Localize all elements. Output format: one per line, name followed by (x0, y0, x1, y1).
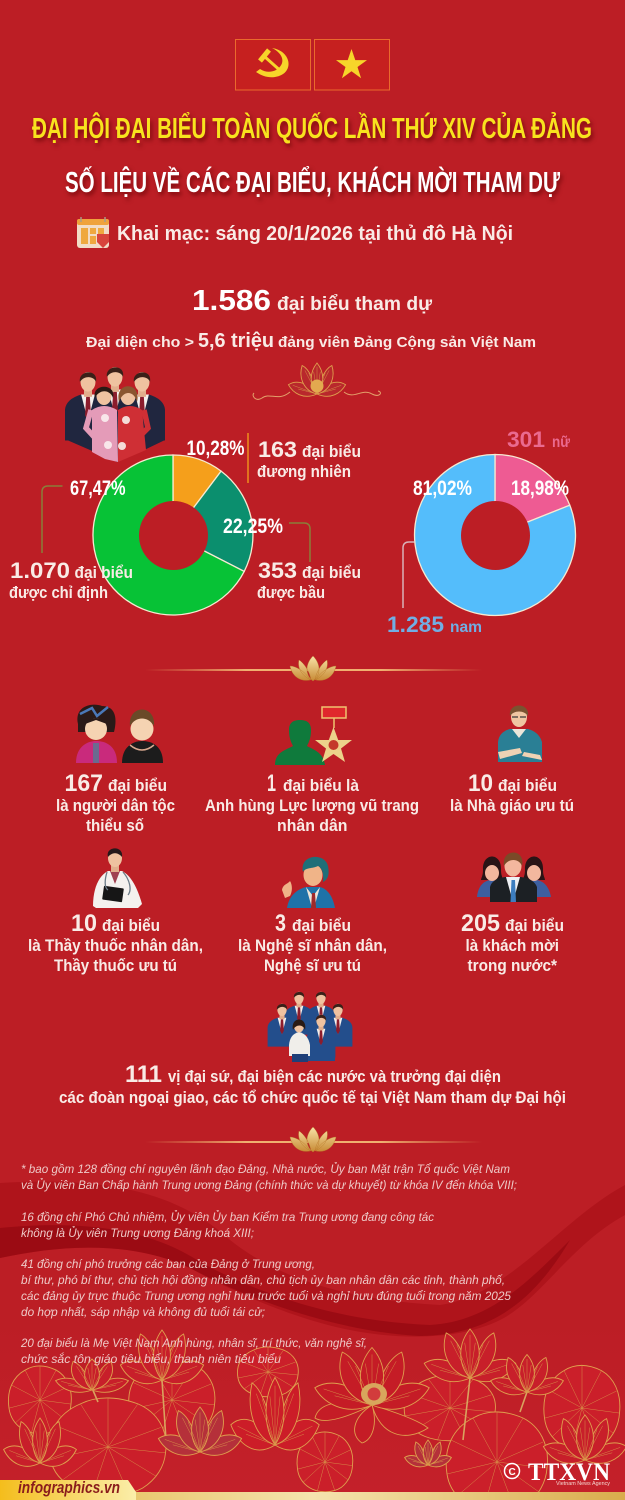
footnote: * bao gồm 128 đồng chí nguyên lãnh đạo Đảng, Nhà nước, Ủy ban Mặt trận Tổ quốc Việt Nam (21, 1161, 510, 1176)
group: female label (507, 427, 570, 500)
party flag (236, 40, 310, 90)
card: artists: 3 (275, 910, 286, 937)
card: outstanding teachers: 10 (468, 770, 493, 797)
card: domestic guests: là khách mời (466, 937, 559, 955)
footnote: không là Ủy viên Trung ương Đảng khoá XIII; (21, 1225, 254, 1240)
footer bar (0, 1478, 625, 1500)
national flag (314, 40, 390, 90)
group: ex-officio delegates label: đại biểu (302, 442, 361, 461)
woman in red ao dai (118, 386, 148, 462)
diplomats text (59, 1061, 566, 1107)
icon: diplomats group (268, 992, 352, 1062)
card: armed forces hero: 1 (267, 770, 276, 797)
group: appointed delegates label: được chỉ định (9, 583, 108, 602)
card: artists: đại biểu (292, 917, 351, 935)
card: doctors: Thầy thuốc ưu tú (54, 957, 177, 975)
group: male label (387, 477, 482, 637)
diplomats text: các đoàn ngoại giao, các tổ chức quốc tế tại Việt Nam tham dự Đại hội (59, 1089, 566, 1107)
card: outstanding teachers: là Nhà giáo ưu tú (450, 797, 574, 815)
footnote: 16 đồng chí Phó Chủ nhiệm, Ủy viên Ủy ban Kiểm tra Trung ương đang công tác (21, 1209, 434, 1224)
card: domestic guests: 205 (461, 910, 500, 937)
group: male label: 81,02% (413, 477, 472, 500)
group: elected delegates label: được bầu (257, 583, 325, 602)
card: doctors: là Thầy thuốc nhân dân, (28, 937, 203, 955)
card: armed forces hero: đại biểu là (283, 777, 360, 795)
divider with gold lotus (145, 1127, 482, 1152)
footnote: các đảng ủy trực thuộc Trung ương nghỉ hưu trước tuổi và nghỉ hưu đúng tuổi trong năm 2025 (21, 1289, 511, 1303)
group: female label: 18,98% (511, 477, 569, 500)
card: ethnic minority delegates: đại biểu (108, 777, 167, 795)
icon: doctor (93, 848, 142, 908)
footnote: do hợp nhất, sáp nhập và không đủ tuổi tái cử; (21, 1305, 265, 1319)
emblem flags (236, 40, 390, 90)
source label: infographics.vn (18, 1478, 120, 1497)
group: appointed delegates label: 67,47% (70, 477, 126, 500)
footnote: bí thư, phó bí thư, chủ tịch hội đồng nhân dân, chủ tịch ủy ban nhân dân các tỉnh, thành phố, (21, 1273, 505, 1287)
TTXVN logo: Vietnam News Agency (556, 1481, 611, 1487)
party members line: Đại diện cho > (86, 334, 194, 351)
card: outstanding teachers: đại biểu (498, 777, 557, 795)
card: domestic guests (461, 852, 564, 975)
woman in pink ao dai (86, 387, 118, 462)
icon: ethnic minority couple (76, 705, 163, 763)
card: artists (238, 857, 387, 975)
icon: delegates group (65, 367, 165, 462)
card: doctors: đại biểu (102, 917, 160, 935)
lotus decoration (4, 1329, 625, 1500)
TTXVN logo: TTXVN (528, 1459, 610, 1486)
group: male label: 1.285 (387, 612, 444, 637)
chart: delegate type donut (93, 455, 253, 615)
footnote (20, 1161, 517, 1366)
card: ethnic minority delegates: thiểu số (86, 817, 144, 835)
group: appointed delegates label: 1.070 (10, 558, 70, 583)
card: doctors: 10 (71, 910, 97, 937)
card: ethnic minority delegates: 167 (64, 770, 103, 797)
group: female label: 301 (507, 427, 545, 452)
lotus leaves (8, 1347, 620, 1500)
icon: hero silhouette with medal (275, 707, 352, 765)
total delegates: đại biểu tham dự (277, 294, 432, 315)
divider with gold lotus (145, 656, 482, 681)
lotus flowers (4, 1329, 625, 1466)
diplomats text: vị đại sứ, đại biện các nước và trưởng đại diện (168, 1068, 501, 1086)
icon: artist (282, 857, 335, 908)
total delegates: 1.586 (192, 285, 271, 317)
party members line (86, 330, 536, 352)
card: ethnic minority delegates (56, 705, 175, 835)
group: ex-officio delegates label: đương nhiên (257, 462, 351, 481)
card: armed forces hero: nhân dân (277, 817, 348, 835)
group: appointed delegates label (9, 477, 133, 602)
footnote: và Ủy viên Ban Chấp hành Trung ương Đảng (chính thức và dự khuyết) từ khóa IV đến khóa VIII; (21, 1177, 517, 1192)
card: armed forces hero (205, 707, 419, 835)
group: ex-officio delegates label: 163 (258, 437, 297, 462)
icon: guests (477, 852, 551, 902)
group: elected delegates label: 353 (258, 558, 297, 583)
footnote: 41 đồng chí phó trưởng các ban của Đảng ở Trung ương, (21, 1257, 315, 1271)
party members line: đảng viên Đảng Cộng sản Việt Nam (278, 334, 536, 351)
total delegates (192, 285, 432, 317)
icon: calendar (77, 217, 109, 248)
woman in white blouse (289, 1020, 310, 1062)
group: elected delegates label (223, 515, 361, 602)
icon: teacher (498, 706, 542, 762)
group: appointed delegates label: đại biểu (74, 563, 133, 582)
group: elected delegates label: 22,25% (223, 515, 283, 538)
group: ex-officio delegates label (186, 433, 361, 483)
ribbon wave (0, 1182, 625, 1337)
card: armed forces hero: Anh hùng Lực lượng vũ trang (205, 797, 419, 815)
lotus stems (92, 1378, 527, 1440)
card: domestic guests: đại biểu (505, 917, 564, 935)
footnote: chức sắc tôn giáo tiêu biểu, thanh niên tiêu biểu (21, 1351, 281, 1366)
group: elected delegates label: đại biểu (302, 563, 361, 582)
small bright lotus flowers (158, 1407, 451, 1467)
TTXVN logo: C (508, 1467, 516, 1478)
card: artists: Nghệ sĩ ưu tú (264, 957, 361, 975)
card: ethnic minority delegates: là người dân tộc (56, 797, 175, 815)
party members line: 5,6 triệu (198, 330, 274, 352)
card: outstanding teachers (450, 706, 574, 815)
large central lotus (315, 1348, 429, 1443)
lotus ornament (253, 363, 380, 399)
footnote: 20 đại biểu là Mẹ Việt Nam Anh hùng, nhân sĩ, trí thức, văn nghệ sĩ, (20, 1336, 367, 1350)
card: domestic guests: trong nước* (468, 957, 558, 975)
group: male label: nam (450, 619, 482, 636)
opening date: Khai mạc: sáng 20/1/2026 tại thủ đô Hà Nội (117, 223, 513, 245)
card: doctors (28, 848, 203, 975)
chart: gender donut (415, 454, 576, 616)
diplomats text: 111 (125, 1061, 162, 1088)
group: ex-officio delegates label: 10,28% (186, 437, 245, 460)
card: artists: là Nghệ sĩ nhân dân, (238, 937, 387, 955)
group: female label: nữ (552, 434, 570, 451)
